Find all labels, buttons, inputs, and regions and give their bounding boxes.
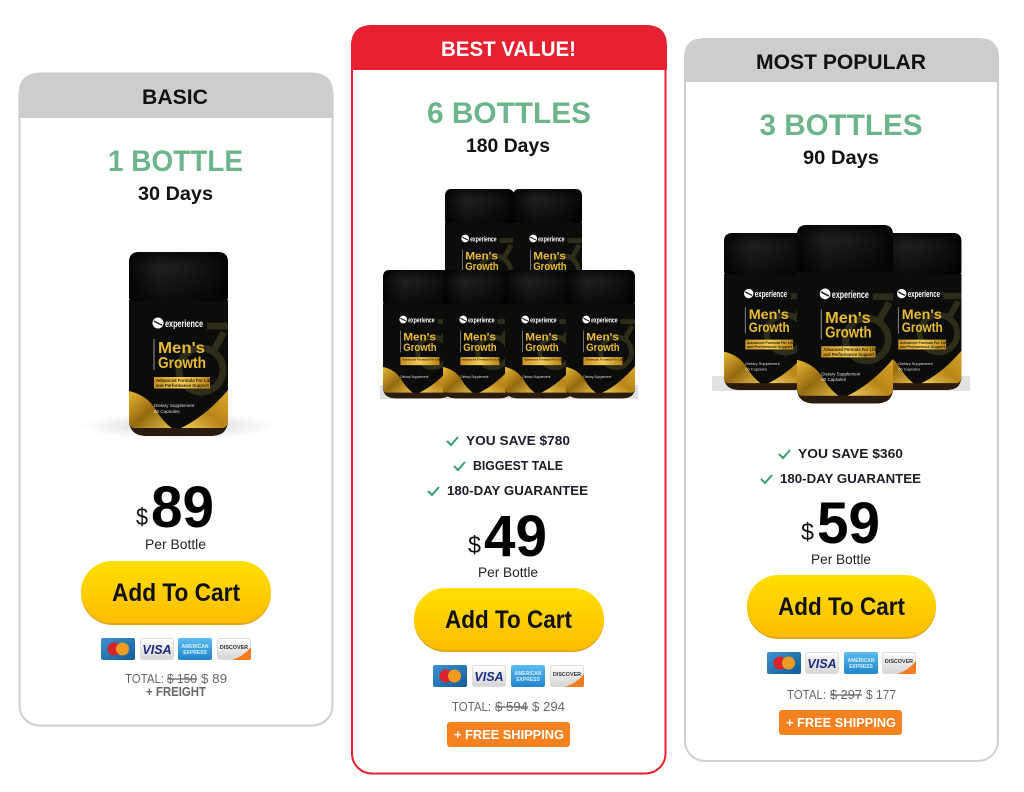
icons: payment cards (433, 665, 584, 687)
header: most popular: MOST POPULAR (756, 51, 926, 74)
icon: six bottles: Men's (586, 331, 619, 343)
button: add to cart: Add To Cart (445, 606, 573, 634)
text: total: TOTAL: (125, 671, 164, 686)
icon: six bottles: experience (591, 315, 618, 324)
price: 89: 89 (151, 475, 214, 540)
icon: single bottle: Men's (158, 340, 205, 357)
header: basic (19, 73, 333, 118)
icon: single bottle: experience (165, 318, 203, 330)
icon: single bottle: Advanced Formula For Libido (156, 378, 217, 383)
icon: six bottles: Dietary Supplement (460, 375, 489, 379)
icon: three bottles: experience (755, 289, 787, 299)
list: benefits: 180-DAY GUARANTEE (780, 472, 921, 486)
price: 49: $ (468, 532, 481, 559)
panel: best value plan (351, 25, 667, 774)
icon: three bottles: and Performance Support (747, 345, 793, 349)
text: total: TOTAL: (787, 687, 826, 702)
icon: single bottle: Growth (158, 355, 206, 372)
icons: payment cards: AMERICAN (182, 644, 209, 650)
icon: six bottles: Growth (463, 342, 497, 354)
icons: payment cards: EXPRESS (849, 664, 873, 670)
header: best value (351, 25, 667, 70)
header: most popular (684, 38, 999, 82)
icon: six bottles: Advanced Formula For Libido (402, 358, 444, 362)
icon: six bottles: Men's (525, 331, 558, 343)
icon: six bottles: Advanced Formula For Libido (524, 358, 566, 362)
icon: six bottles (380, 189, 638, 399)
icons: payment cards: EXPRESS (516, 677, 540, 683)
heading: 1 bottle: 1 BOTTLE (108, 145, 243, 178)
icon: six bottles: Dietary Supplement (583, 375, 612, 379)
icon: three bottles: Advanced Formula For Libido (747, 341, 800, 345)
icon: six bottles: experience (408, 315, 435, 324)
icon: three bottles: Advanced Formula For Libido (900, 341, 953, 345)
heading: 3 bottles: 3 BOTTLES (760, 109, 922, 142)
icon: three bottles (712, 225, 970, 403)
badge: free shipping (447, 722, 570, 747)
icon: three bottles: and Performance Support (900, 345, 946, 349)
icon: three bottles: Dietary Supplement (745, 361, 781, 366)
button: add to cart: Add To Cart (112, 579, 241, 607)
icon: six bottles: Dietary Supplement (400, 375, 429, 379)
icon: six bottles: Advanced Formula For Libido (462, 358, 504, 362)
text: total: $ 297 (830, 687, 862, 702)
icons: payment cards (101, 638, 251, 660)
header: basic: BASIC (142, 86, 208, 109)
icons: payment cards: AMERICAN (515, 671, 542, 677)
icons: payment cards: VISA (474, 670, 504, 684)
icon: three bottles: experience (908, 289, 940, 299)
icon: three bottles: experience (832, 290, 869, 301)
badge: free shipping (779, 710, 902, 735)
icons: payment cards: VISA (142, 643, 172, 657)
icon: three bottles: Growth (902, 320, 943, 335)
label: per bottle: Per Bottle (145, 536, 206, 552)
list: benefits: BIGGEST TALE (473, 459, 563, 473)
text: total (452, 699, 565, 714)
icon: three bottles: 60 Capsules (898, 366, 920, 371)
icons: payment cards: DISCOVER (885, 659, 913, 665)
icon: six bottles: Growth (525, 342, 559, 354)
badge: free shipping: + FREE SHIPPING (786, 716, 896, 730)
text: total: $ 89 (201, 671, 227, 686)
price: 59: $ (801, 519, 814, 546)
icon: six bottles: Growth (403, 342, 437, 354)
text: total: $ 594 (495, 699, 528, 714)
label: per bottle: Per Bottle (478, 564, 538, 580)
heading: 6 bottles: 6 BOTTLES (427, 97, 591, 130)
icon: six bottles: Growth (586, 342, 620, 354)
icon: three bottles: Growth (825, 325, 872, 342)
icon: three bottles: Advanced Formula For Libido (823, 347, 883, 352)
list: benefits: YOU SAVE $360 (798, 447, 903, 461)
icon: six bottles: experience (538, 234, 565, 243)
icon: three bottles: Men's (902, 307, 942, 322)
icons: payment cards: VISA (807, 657, 837, 671)
button: add to cart: Add To Cart (778, 593, 906, 621)
text: total: $ 177 (866, 687, 896, 702)
list: benefits: YOU SAVE $780 (466, 434, 570, 448)
icon: three bottles: Dietary Supplement (821, 371, 861, 376)
icons: payment cards: DISCOVER (220, 645, 248, 651)
text: total: TOTAL: (452, 699, 491, 714)
header: best value: BEST VALUE! (441, 38, 576, 61)
icon: six bottles: Growth (533, 261, 567, 273)
panel: most popular plan (684, 38, 999, 761)
button: add to cart (747, 575, 936, 639)
list: benefits (761, 447, 921, 486)
icons: payment cards: DISCOVER (553, 672, 581, 678)
icon: three bottles: Growth (749, 320, 790, 335)
icon: six bottles: Dietary Supplement (522, 375, 551, 379)
icon: six bottles: Men's (403, 331, 436, 343)
price: 49: 49 (484, 504, 547, 569)
icon: single bottle (78, 252, 278, 440)
icon: six bottles: Men's (465, 250, 498, 262)
list: benefits (428, 434, 588, 498)
subheading: 180 days: 180 Days (466, 136, 550, 157)
label: per bottle: Per Bottle (811, 551, 871, 567)
icons: payment cards (767, 652, 916, 674)
icon: three bottles: Men's (749, 307, 789, 322)
icons: payment cards: EXPRESS (183, 650, 207, 656)
text: total (125, 671, 227, 686)
icon: six bottles: experience (530, 315, 557, 324)
text: total: $ 150 (167, 671, 197, 686)
icon: single bottle: and Performance Support (156, 383, 209, 388)
icon: six bottles: experience (470, 234, 497, 243)
icon: three bottles: 60 Capsules (821, 377, 847, 382)
icon: six bottles: Growth (465, 261, 499, 273)
button: add to cart (81, 561, 271, 625)
icon: six bottles: Advanced Formula For Libido (585, 358, 627, 362)
panel: basic plan (19, 73, 333, 726)
icon: single bottle: 60 Capsules (154, 409, 180, 414)
text: total: $ 294 (532, 699, 565, 714)
icon: three bottles: Men's (825, 310, 871, 327)
icon: three bottles: and Performance Support (823, 352, 875, 357)
icon: six bottles: Men's (463, 331, 496, 343)
list: benefits: 180-DAY GUARANTEE (447, 484, 588, 498)
icon: single bottle: Dietary Supplement (154, 403, 195, 408)
text: total (787, 687, 896, 702)
icon: six bottles: Men's (533, 250, 566, 262)
icon: three bottles: Dietary Supplement (898, 361, 934, 366)
badge: free shipping: + FREE SHIPPING (454, 728, 564, 742)
subheading: 90 days: 90 Days (803, 148, 879, 169)
subheading: 30 days: 30 Days (138, 184, 213, 205)
icons: payment cards: AMERICAN (848, 658, 875, 664)
icon: six bottles: experience (468, 315, 495, 324)
button: add to cart (414, 588, 604, 652)
price: 59: 59 (817, 491, 880, 556)
icon: three bottles: 60 Capsules (745, 366, 767, 371)
text: freight: + FREIGHT (146, 684, 206, 699)
price: 89: $ (136, 504, 148, 531)
